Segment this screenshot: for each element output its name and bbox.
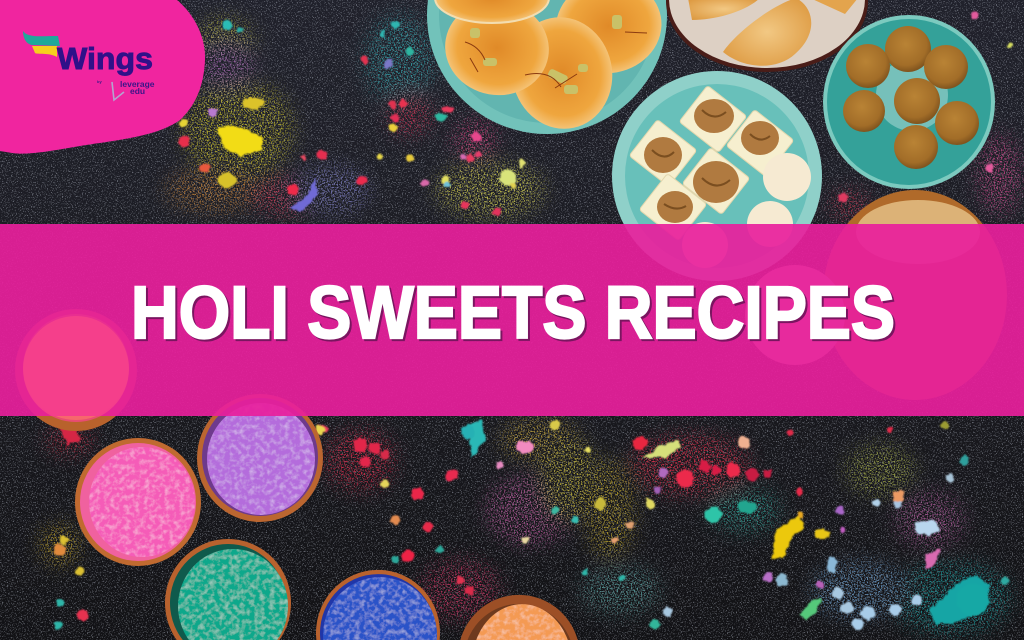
overlay tint: pink circle over yellow bowl — [23, 316, 129, 422]
pancake — [501, 8, 623, 138]
logo byline — [97, 79, 155, 100]
panel: sweets plates — [427, 0, 1007, 400]
laddu balls — [843, 26, 979, 169]
icon: wing mark — [23, 31, 60, 57]
logo byline: by — [97, 79, 102, 84]
centre lower spots — [467, 420, 485, 458]
coconut balls — [682, 153, 811, 268]
samosa — [810, 0, 858, 14]
top left spots — [218, 125, 262, 156]
plate: pancakes — [427, 0, 669, 138]
pancake — [435, 0, 549, 23]
banner: pink band — [0, 224, 1024, 416]
paratha — [745, 190, 1007, 400]
logo badge — [0, 0, 205, 154]
title: HOLI SWEETS RECIPES — [133, 272, 897, 356]
samosa — [688, 0, 760, 20]
logo wordmark: Wings — [57, 41, 153, 76]
samosa — [723, 0, 811, 66]
nut garnish — [470, 15, 622, 94]
title: HOLI SWEETS RECIPES — [131, 270, 895, 354]
right top spots — [986, 164, 994, 172]
walnuts — [644, 99, 779, 223]
plate: samosas — [666, 0, 868, 72]
panel: colour powder bowls — [15, 309, 578, 640]
logo byline: edu — [130, 86, 145, 96]
bowl: green — [165, 539, 291, 640]
pancake — [438, 0, 556, 103]
bowl: pink — [75, 438, 201, 566]
bowl: blue — [316, 570, 440, 640]
lower left spots — [55, 415, 80, 445]
badge blob — [0, 0, 205, 154]
saffron strands — [465, 32, 647, 88]
bowl: purple — [197, 394, 323, 522]
plate: barfi — [612, 71, 822, 281]
logo byline: leverage — [120, 79, 155, 89]
bowl: yellow — [15, 309, 137, 431]
lower right spots — [633, 436, 647, 450]
plate: laddus — [823, 15, 995, 189]
pancake — [548, 0, 669, 82]
barfi squares — [629, 85, 794, 241]
bowl: orange — [460, 595, 578, 640]
